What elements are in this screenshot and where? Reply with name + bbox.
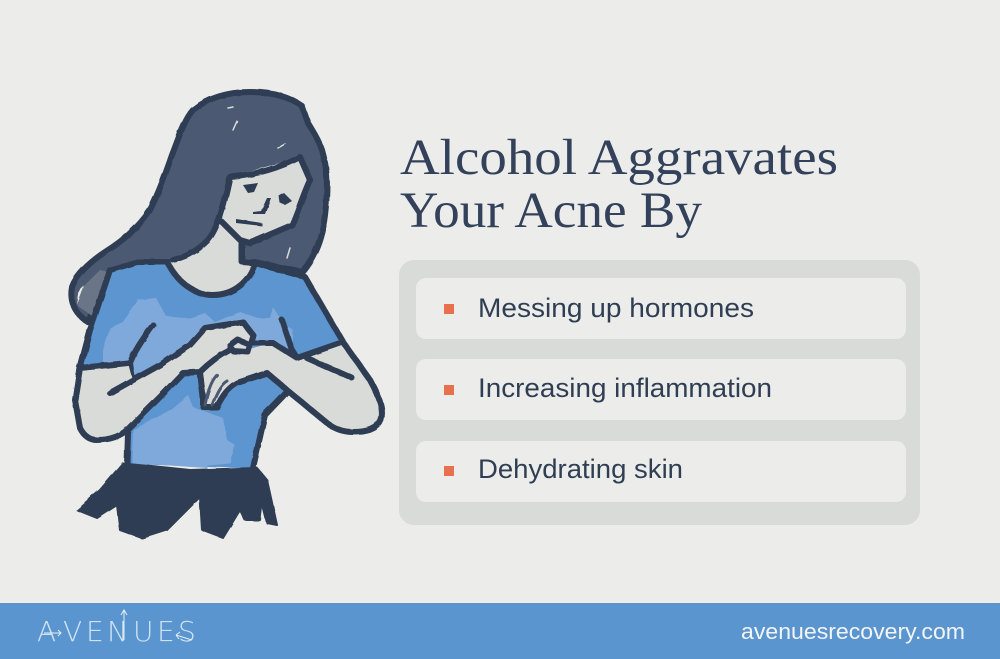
title [400, 130, 838, 239]
eyes nose mouth [236, 183, 292, 226]
item: dehydrating: Dehydrating skin [478, 454, 683, 484]
item: dehydrating [416, 441, 906, 502]
item: hormones: Messing up hormones [478, 293, 754, 323]
shirt [80, 262, 343, 468]
illustration: woman scratching her arm [71, 92, 383, 538]
panel: list of effects [399, 260, 920, 525]
arms and hands [75, 322, 383, 440]
item: hormones [416, 278, 906, 339]
item: inflammation [416, 359, 906, 420]
face and neck [168, 157, 310, 295]
logo: AVENUES [37, 615, 196, 648]
title: Your Acne By [400, 183, 703, 239]
hair [71, 92, 327, 322]
light blue shading: torso [132, 395, 235, 468]
title: Alcohol Aggravates [400, 130, 838, 186]
light blue shading: chest [103, 298, 293, 378]
item: inflammation: Increasing inflammation [478, 373, 772, 403]
footer bar [0, 603, 1000, 659]
website: avenuesrecovery.com [741, 619, 965, 644]
skirt [77, 463, 277, 538]
